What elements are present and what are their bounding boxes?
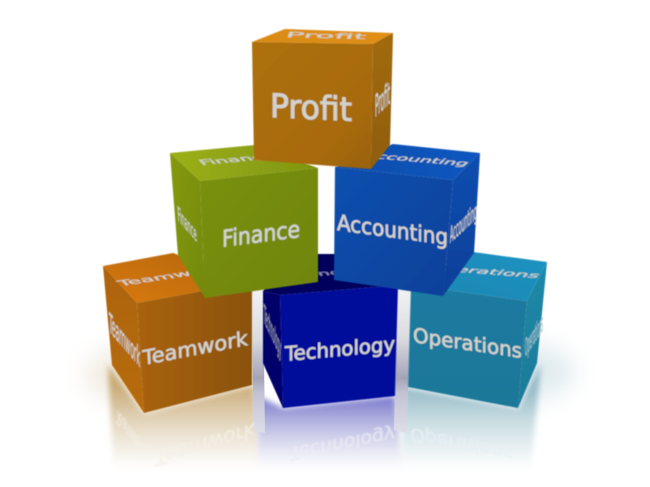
label: front: Teamwork xyxy=(141,327,248,370)
label: side: Teamwork xyxy=(109,307,140,374)
label: top: Accounting xyxy=(360,151,472,168)
light strip between Teamwork and Technology xyxy=(252,285,265,433)
label: side: Operations xyxy=(525,310,543,364)
top face xyxy=(335,144,480,180)
label: front: Accounting xyxy=(337,210,448,251)
floor shadows and glow xyxy=(85,342,575,405)
label: side: Profit xyxy=(375,76,390,125)
label: front: Technology xyxy=(284,332,395,366)
left face xyxy=(170,153,205,298)
reflected cube labels xyxy=(116,402,513,471)
reflected cube labels: Technology xyxy=(289,423,395,465)
reflected cube labels: Teamwork xyxy=(116,402,146,466)
label: top: Operations xyxy=(423,263,543,280)
left face xyxy=(103,266,144,413)
label: front: Operations xyxy=(413,323,522,363)
top face xyxy=(252,29,393,44)
label: top: Profit xyxy=(284,30,368,41)
cube: Finance xyxy=(170,145,318,298)
label: front: Finance xyxy=(222,216,300,253)
reflected cube labels: Teamwork xyxy=(154,418,255,471)
label: side: Finance xyxy=(177,202,197,247)
front face xyxy=(200,168,318,298)
front face xyxy=(334,167,453,296)
label: top: Technology xyxy=(272,265,383,281)
floor reflections of the bottom cubes xyxy=(108,363,541,478)
right face xyxy=(518,262,547,408)
label: front: Profit xyxy=(270,88,352,130)
front face xyxy=(280,285,398,408)
left face xyxy=(263,291,283,408)
right face xyxy=(371,33,393,169)
label: top: Teamwork xyxy=(114,264,228,288)
right face xyxy=(443,153,480,296)
cube: Profit xyxy=(252,29,393,169)
light strip between Technology and Operations xyxy=(394,285,411,433)
top face xyxy=(103,253,252,303)
top face xyxy=(263,254,398,295)
cube: Technology xyxy=(263,254,398,408)
label: side: Technology xyxy=(264,300,281,365)
label: side: Accounting xyxy=(450,198,477,248)
top face xyxy=(411,252,547,301)
front face xyxy=(408,285,527,408)
reflected cube labels: Operations xyxy=(410,423,513,465)
cube: Operations xyxy=(408,252,547,408)
top face xyxy=(170,145,318,181)
front face xyxy=(137,282,252,413)
cube: Teamwork xyxy=(103,253,252,413)
label: top: Finance xyxy=(196,152,279,167)
front face xyxy=(252,42,373,169)
cube: Accounting xyxy=(334,144,480,296)
